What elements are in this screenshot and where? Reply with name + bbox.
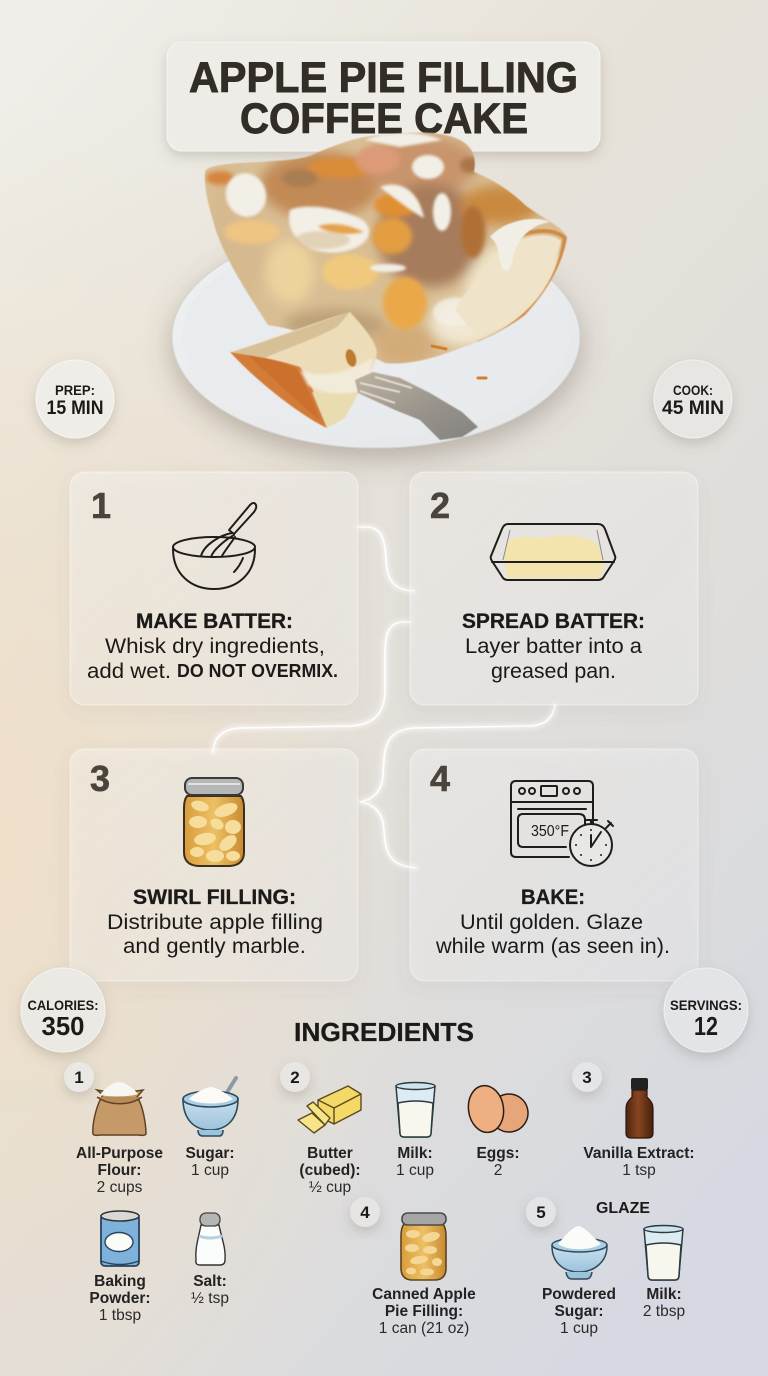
badge: servings bbox=[664, 968, 748, 1052]
badge 2: 2 bbox=[290, 1068, 300, 1087]
milk label: Milk: bbox=[397, 1145, 433, 1162]
step description: Until golden. Glaze bbox=[460, 911, 643, 934]
sugar label bbox=[185, 1145, 235, 1179]
step heading: MAKE BATTER: bbox=[136, 610, 293, 633]
ingredient group 4: filling bbox=[350, 1197, 476, 1337]
badge: prep time bbox=[36, 360, 114, 438]
milk label: 1 cup bbox=[396, 1162, 434, 1179]
powdered sugar label: Sugar: bbox=[554, 1303, 604, 1320]
apple pieces bbox=[206, 146, 485, 329]
butter label bbox=[299, 1145, 361, 1196]
baking powder label: Powder: bbox=[89, 1290, 151, 1307]
step description: Whisk dry ingredients, bbox=[105, 635, 325, 658]
butter label: ½ cup bbox=[309, 1179, 351, 1196]
badge: servings: SERVINGS: bbox=[670, 997, 742, 1013]
glaze milk label bbox=[643, 1286, 685, 1320]
vanilla label: 1 tsp bbox=[622, 1162, 656, 1179]
step description: DO NOT OVERMIX. bbox=[177, 661, 338, 681]
title: APPLE PIE FILLING bbox=[189, 54, 578, 102]
powdered sugar label: 1 cup bbox=[560, 1320, 598, 1337]
step description: Distribute apple filling bbox=[107, 911, 323, 934]
badge: servings: 12 bbox=[694, 1011, 718, 1041]
icon: flour sack bbox=[93, 1082, 146, 1135]
badge: prep time: 15 MIN bbox=[46, 398, 104, 419]
ingredient group 5: glaze bbox=[526, 1197, 685, 1337]
glaze milk label: 2 tbsp bbox=[643, 1303, 685, 1320]
step description bbox=[87, 635, 338, 683]
icon: glass of milk bbox=[396, 1082, 435, 1137]
badge: prep time: PREP: bbox=[55, 383, 95, 398]
ingredient group 1: dry bbox=[64, 1062, 238, 1324]
icon: baking pan bbox=[491, 524, 615, 580]
badge: calories bbox=[21, 968, 105, 1052]
step description bbox=[107, 911, 323, 958]
butter label: (cubed): bbox=[299, 1162, 361, 1179]
step number 4: 4 bbox=[430, 758, 450, 799]
icon: oven with timer bbox=[511, 781, 613, 866]
step description bbox=[435, 911, 670, 958]
crust rim right bbox=[478, 231, 565, 343]
flour label: Flour: bbox=[98, 1162, 141, 1179]
fork bbox=[355, 372, 478, 440]
step heading: BAKE: bbox=[521, 886, 585, 909]
ingredient group 3: vanilla bbox=[572, 1062, 695, 1179]
sugar label: Sugar: bbox=[185, 1145, 235, 1162]
glaze heading: GLAZE bbox=[596, 1200, 650, 1217]
badge: cook time: COOK: bbox=[673, 383, 713, 398]
icon: baking powder can bbox=[101, 1211, 139, 1266]
icon: oven with timer: 350°F bbox=[531, 823, 569, 840]
icon: jar of apple filling bbox=[184, 778, 244, 866]
flour label: 2 cups bbox=[97, 1179, 143, 1196]
badge: cook time bbox=[654, 360, 732, 438]
badge: calories: 350 bbox=[42, 1011, 84, 1041]
glaze drip on right edge bbox=[490, 219, 550, 271]
title: COFFEE CAKE bbox=[240, 95, 528, 143]
flour label bbox=[76, 1145, 163, 1196]
step description: greased pan. bbox=[491, 660, 616, 683]
ingredient group 2: wet bbox=[280, 1062, 531, 1196]
panel: step 2 spread batter bbox=[410, 472, 698, 705]
icon: whisk and bowl bbox=[173, 503, 256, 589]
icon: vanilla bottle bbox=[626, 1078, 653, 1138]
salt label: ½ tsp bbox=[191, 1290, 229, 1307]
plate bbox=[172, 226, 580, 448]
badge 5 bbox=[526, 1197, 556, 1227]
icon: canned filling jar bbox=[401, 1213, 446, 1280]
eggs label bbox=[476, 1145, 520, 1179]
vanilla label bbox=[583, 1145, 695, 1179]
badge: cook time: 45 MIN bbox=[662, 398, 724, 419]
badge 4: 4 bbox=[360, 1203, 370, 1222]
badge 2 bbox=[280, 1062, 310, 1092]
badge 1 bbox=[64, 1062, 94, 1092]
badge 5: 5 bbox=[536, 1203, 546, 1222]
step description: while warm (as seen in). bbox=[435, 935, 670, 958]
salt label: Salt: bbox=[193, 1273, 227, 1290]
badge 3: 3 bbox=[582, 1068, 592, 1087]
small cut slice bbox=[230, 312, 377, 428]
icon: salt shaker bbox=[196, 1213, 225, 1265]
step number 2: 2 bbox=[430, 485, 450, 526]
salt label bbox=[191, 1273, 229, 1307]
powdered sugar label bbox=[542, 1286, 616, 1337]
baking powder label bbox=[89, 1273, 151, 1324]
eggs label: 2 bbox=[494, 1162, 502, 1179]
filling label: Pie Filling: bbox=[385, 1303, 463, 1320]
milk label bbox=[396, 1145, 434, 1179]
blended surface colours bbox=[205, 135, 575, 367]
filling label: 1 can (21 oz) bbox=[379, 1320, 469, 1337]
icon: powdered sugar bowl bbox=[552, 1226, 607, 1279]
step number 1: 1 bbox=[91, 485, 111, 526]
step heading: SWIRL FILLING: bbox=[133, 886, 296, 909]
step number 3: 3 bbox=[90, 758, 110, 799]
butter label: Butter bbox=[307, 1145, 353, 1162]
step description: add wet. bbox=[87, 660, 171, 683]
filling label bbox=[372, 1286, 476, 1337]
baking powder label: 1 tbsp bbox=[99, 1307, 141, 1324]
connector: glowing lines between steps bbox=[213, 527, 555, 868]
icon: milk glass bbox=[644, 1226, 683, 1280]
cake body and top bbox=[204, 132, 568, 364]
sugar label: 1 cup bbox=[191, 1162, 229, 1179]
panel: step 1 make batter bbox=[70, 472, 358, 705]
glaze milk label: Milk: bbox=[646, 1286, 682, 1303]
powdered sugar label: Powdered bbox=[542, 1286, 616, 1303]
title bbox=[189, 54, 578, 143]
step description bbox=[465, 635, 642, 683]
title panel bbox=[167, 42, 600, 151]
step heading: SPREAD BATTER: bbox=[462, 610, 645, 633]
glaze bbox=[220, 133, 477, 326]
icon: sugar bowl bbox=[183, 1078, 238, 1136]
panel: step 3 swirl filling bbox=[70, 749, 358, 981]
ingredients heading: INGREDIENTS bbox=[294, 1017, 474, 1047]
badge: calories: CALORIES: bbox=[28, 997, 98, 1013]
eggs label: Eggs: bbox=[476, 1145, 520, 1162]
filling label: Canned Apple bbox=[372, 1286, 476, 1303]
panel: step 4 bake bbox=[410, 749, 698, 981]
step description: and gently marble. bbox=[123, 935, 306, 958]
vanilla label: Vanilla Extract: bbox=[583, 1145, 695, 1162]
icon: eggs bbox=[465, 1083, 531, 1135]
flour label: All-Purpose bbox=[76, 1145, 163, 1162]
badge 1: 1 bbox=[74, 1068, 84, 1087]
hero illustration: cake slice on plate bbox=[172, 125, 580, 448]
icon: butter bbox=[298, 1086, 361, 1133]
baking powder label: Baking bbox=[94, 1273, 146, 1290]
step description: Layer batter into a bbox=[465, 635, 642, 658]
